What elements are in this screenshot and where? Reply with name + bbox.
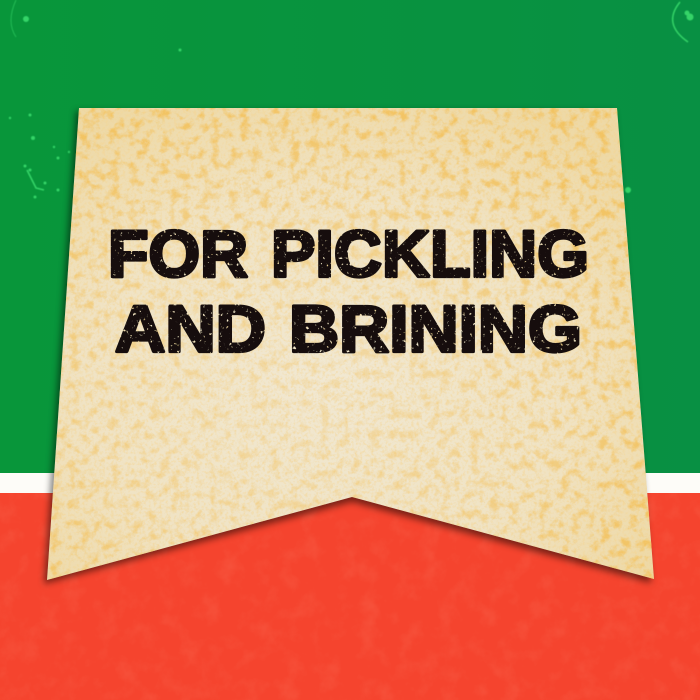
heading line 2 (115, 292, 582, 366)
red background band (0, 493, 700, 700)
heading line 2: BRINING (289, 292, 582, 366)
green background band (0, 0, 700, 473)
heading line 1: FOR (108, 216, 248, 290)
paper banner (40, 100, 660, 590)
green scuff marks (9, 0, 694, 198)
banner shadow (44, 111, 651, 584)
heading (108, 216, 589, 366)
heading line 1 (108, 216, 589, 290)
white stripe (0, 473, 700, 493)
heading line 2: AND (115, 292, 266, 366)
heading line 1: PICKLING (271, 216, 589, 290)
